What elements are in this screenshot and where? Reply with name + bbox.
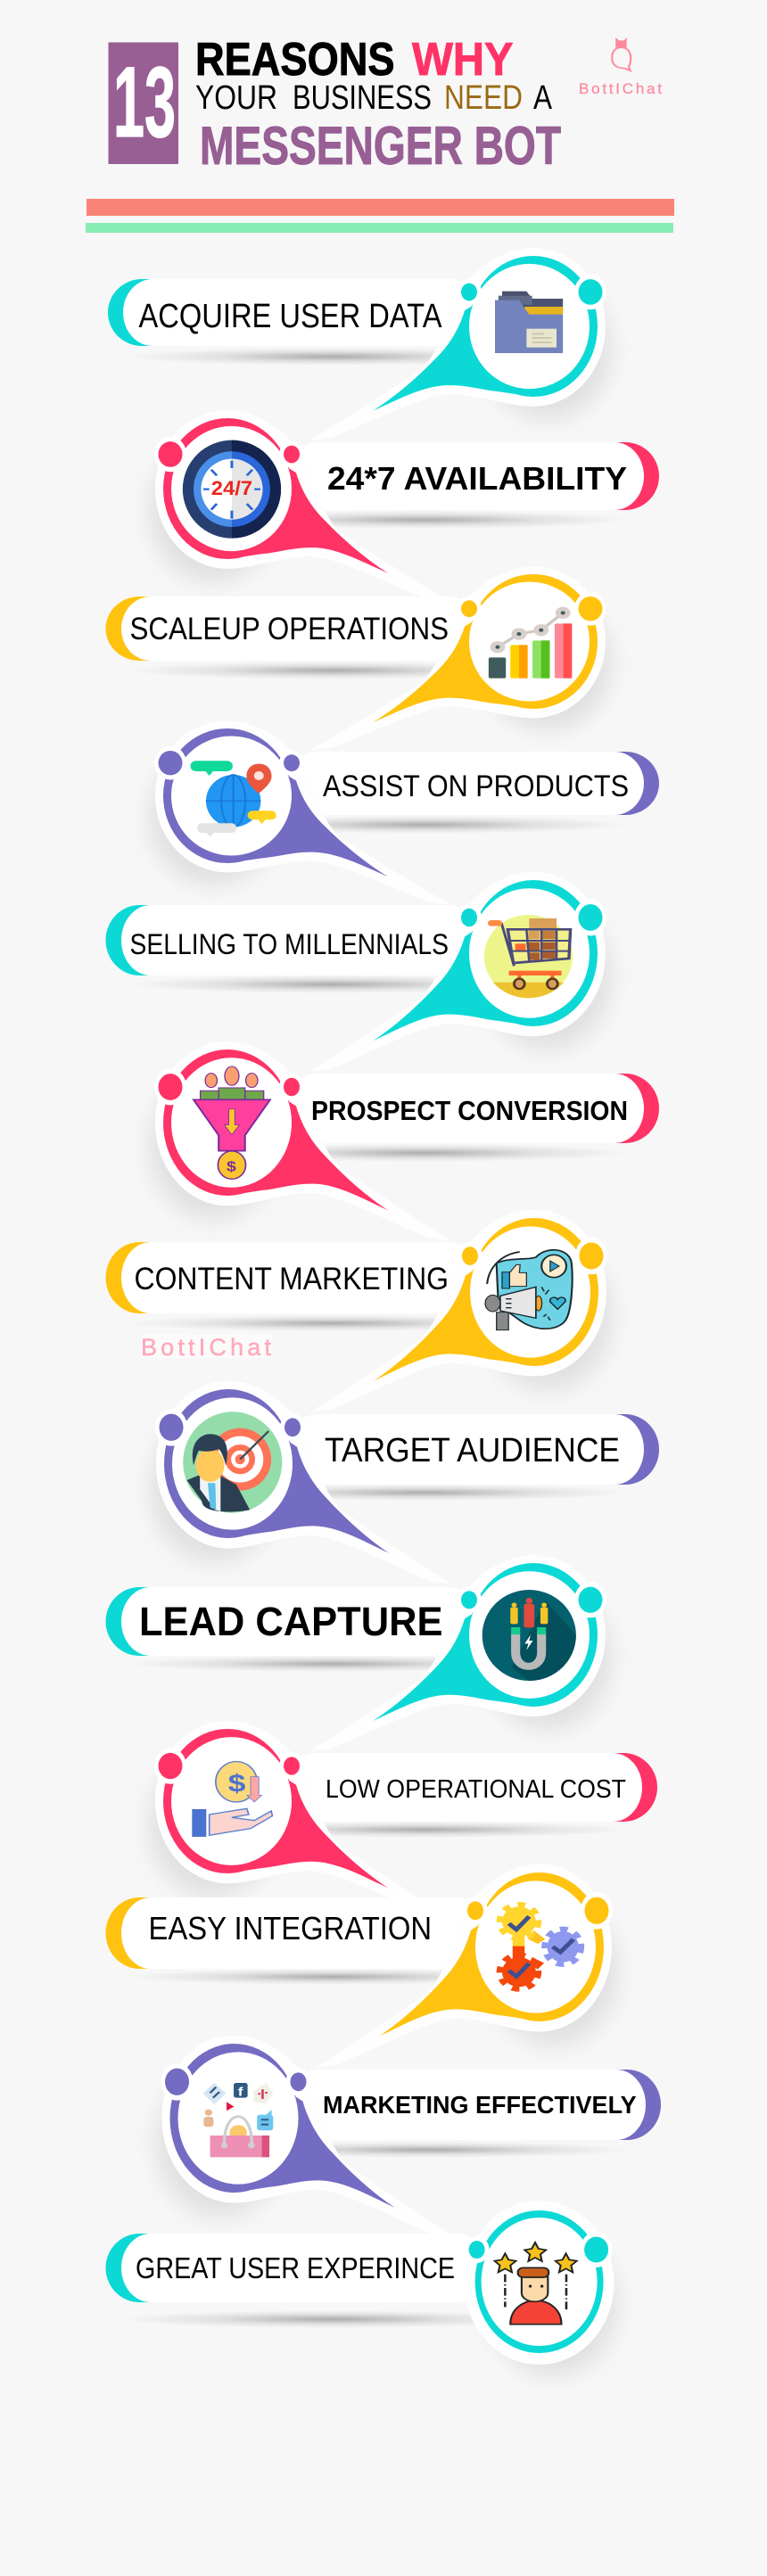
icon: clock (183, 440, 281, 539)
label: ASSIST ON PRODUCTS (323, 770, 629, 803)
label: LOW OPERATIONAL COST (326, 1775, 626, 1804)
icon: globe with pin (191, 761, 276, 837)
icon: shopping cart (484, 915, 573, 998)
logo: BottIChat: BottIChat (579, 80, 662, 97)
item 4: assist on products (149, 720, 659, 904)
pill (105, 1897, 487, 1969)
pill (108, 279, 480, 346)
green divider bar (86, 223, 673, 233)
label: ACQUIRE USER DATA (139, 298, 442, 335)
pill shadow (219, 1822, 629, 1838)
callout bubble (150, 1381, 451, 1584)
header (109, 34, 662, 176)
pill (287, 442, 659, 510)
callout bubble (149, 720, 450, 904)
title line 2 (195, 79, 553, 117)
callout bubble (149, 1721, 450, 1918)
pill shadow (128, 348, 538, 366)
pill shadow (128, 1656, 538, 1672)
pill shadow (219, 1485, 629, 1501)
callout bubble (310, 872, 612, 1071)
item 2: 24*7 availability (149, 410, 659, 602)
icon: user with stars (495, 2243, 577, 2325)
item 6: prospect conversion (149, 1041, 659, 1240)
red divider bar (87, 199, 674, 216)
icon: magnet attracting people (482, 1590, 576, 1681)
title line 1: WHY (412, 34, 514, 86)
watermark logo: BottIChat (141, 1334, 271, 1361)
item 5: selling to millennials (105, 872, 612, 1071)
icon: bar chart (489, 607, 572, 679)
pill shadow (128, 662, 538, 679)
title line 3: MESSENGER BOT (200, 116, 561, 176)
callout bubble (311, 1210, 613, 1411)
title line 2: BUSINESS (293, 79, 432, 117)
icon: gears (500, 1905, 581, 1988)
pill shadow (119, 2310, 547, 2328)
pill (105, 905, 478, 975)
pill shadow (223, 2142, 633, 2158)
pill (105, 1587, 478, 1656)
item 10: low operational cost (149, 1721, 657, 1918)
title line 2: A (533, 79, 553, 117)
label: 24*7 AVAILABILITY (327, 460, 627, 497)
icon: person with target (183, 1411, 282, 1513)
pill shadow (128, 975, 538, 993)
label: PROSPECT CONVERSION (311, 1095, 628, 1126)
pill shadow (219, 816, 629, 834)
item 12: marketing effectively (155, 2036, 661, 2238)
callout bubble (149, 1041, 450, 1240)
item 3: scaleup operations (105, 566, 612, 750)
callout bubble (310, 1555, 612, 1750)
number badge: 13 (109, 43, 178, 164)
pill shadow (219, 511, 629, 529)
title line 2: YOUR (195, 79, 277, 117)
label: EASY INTEGRATION (148, 1910, 432, 1946)
pill shadow (128, 1315, 538, 1331)
label: LEAD CAPTURE (139, 1599, 442, 1644)
icon: clock: 24/7 (211, 478, 252, 499)
pill (289, 2070, 661, 2140)
callout bubble (155, 2036, 457, 2238)
callout bubble (465, 2201, 618, 2376)
label: MARKETING EFFECTIVELY (323, 2091, 637, 2119)
pill (105, 2234, 487, 2302)
icon: sales funnel (194, 1066, 270, 1179)
icon: hand with coin: $ (228, 1769, 246, 1797)
callout bubble (310, 248, 612, 440)
icon: megaphone with social blob (485, 1250, 573, 1330)
callout bubble (317, 1864, 618, 2067)
item 8: target audience (150, 1381, 659, 1584)
pill (287, 752, 659, 815)
title line 2: NEED (444, 79, 523, 117)
label: SCALEUP OPERATIONS (130, 612, 449, 646)
pill shadow (128, 1969, 538, 1985)
label: TARGET AUDIENCE (325, 1432, 620, 1469)
pill (105, 1242, 478, 1313)
callout bubble (310, 566, 612, 750)
number badge: 13: 13 (113, 46, 176, 158)
logo: BottIChat (579, 37, 662, 97)
label: SELLING TO MILLENNIALS (130, 928, 449, 960)
pill (287, 1414, 659, 1485)
item 7: content marketing (105, 1210, 613, 1411)
title line 1: REASONS (195, 34, 394, 86)
icon: hand with coin (192, 1762, 272, 1837)
pill (105, 597, 478, 661)
label: GREAT USER EXPERINCE (136, 2251, 455, 2284)
icon: folder (495, 292, 563, 353)
pill shadow (219, 1144, 629, 1162)
item 1: acquire user data (108, 248, 612, 440)
icon: shopping bag with social icons (203, 2083, 273, 2157)
callout bubble (149, 410, 450, 602)
icon: shopping bag with social icons: f (238, 2086, 243, 2099)
pill (285, 1753, 657, 1822)
pill (287, 1074, 659, 1143)
icon: sales funnel: $ (227, 1158, 236, 1174)
item 13: great user experince (105, 2201, 618, 2376)
item 11: easy integration (105, 1864, 618, 2067)
label: CONTENT MARKETING (134, 1262, 449, 1296)
item 9: lead capture (105, 1555, 612, 1750)
